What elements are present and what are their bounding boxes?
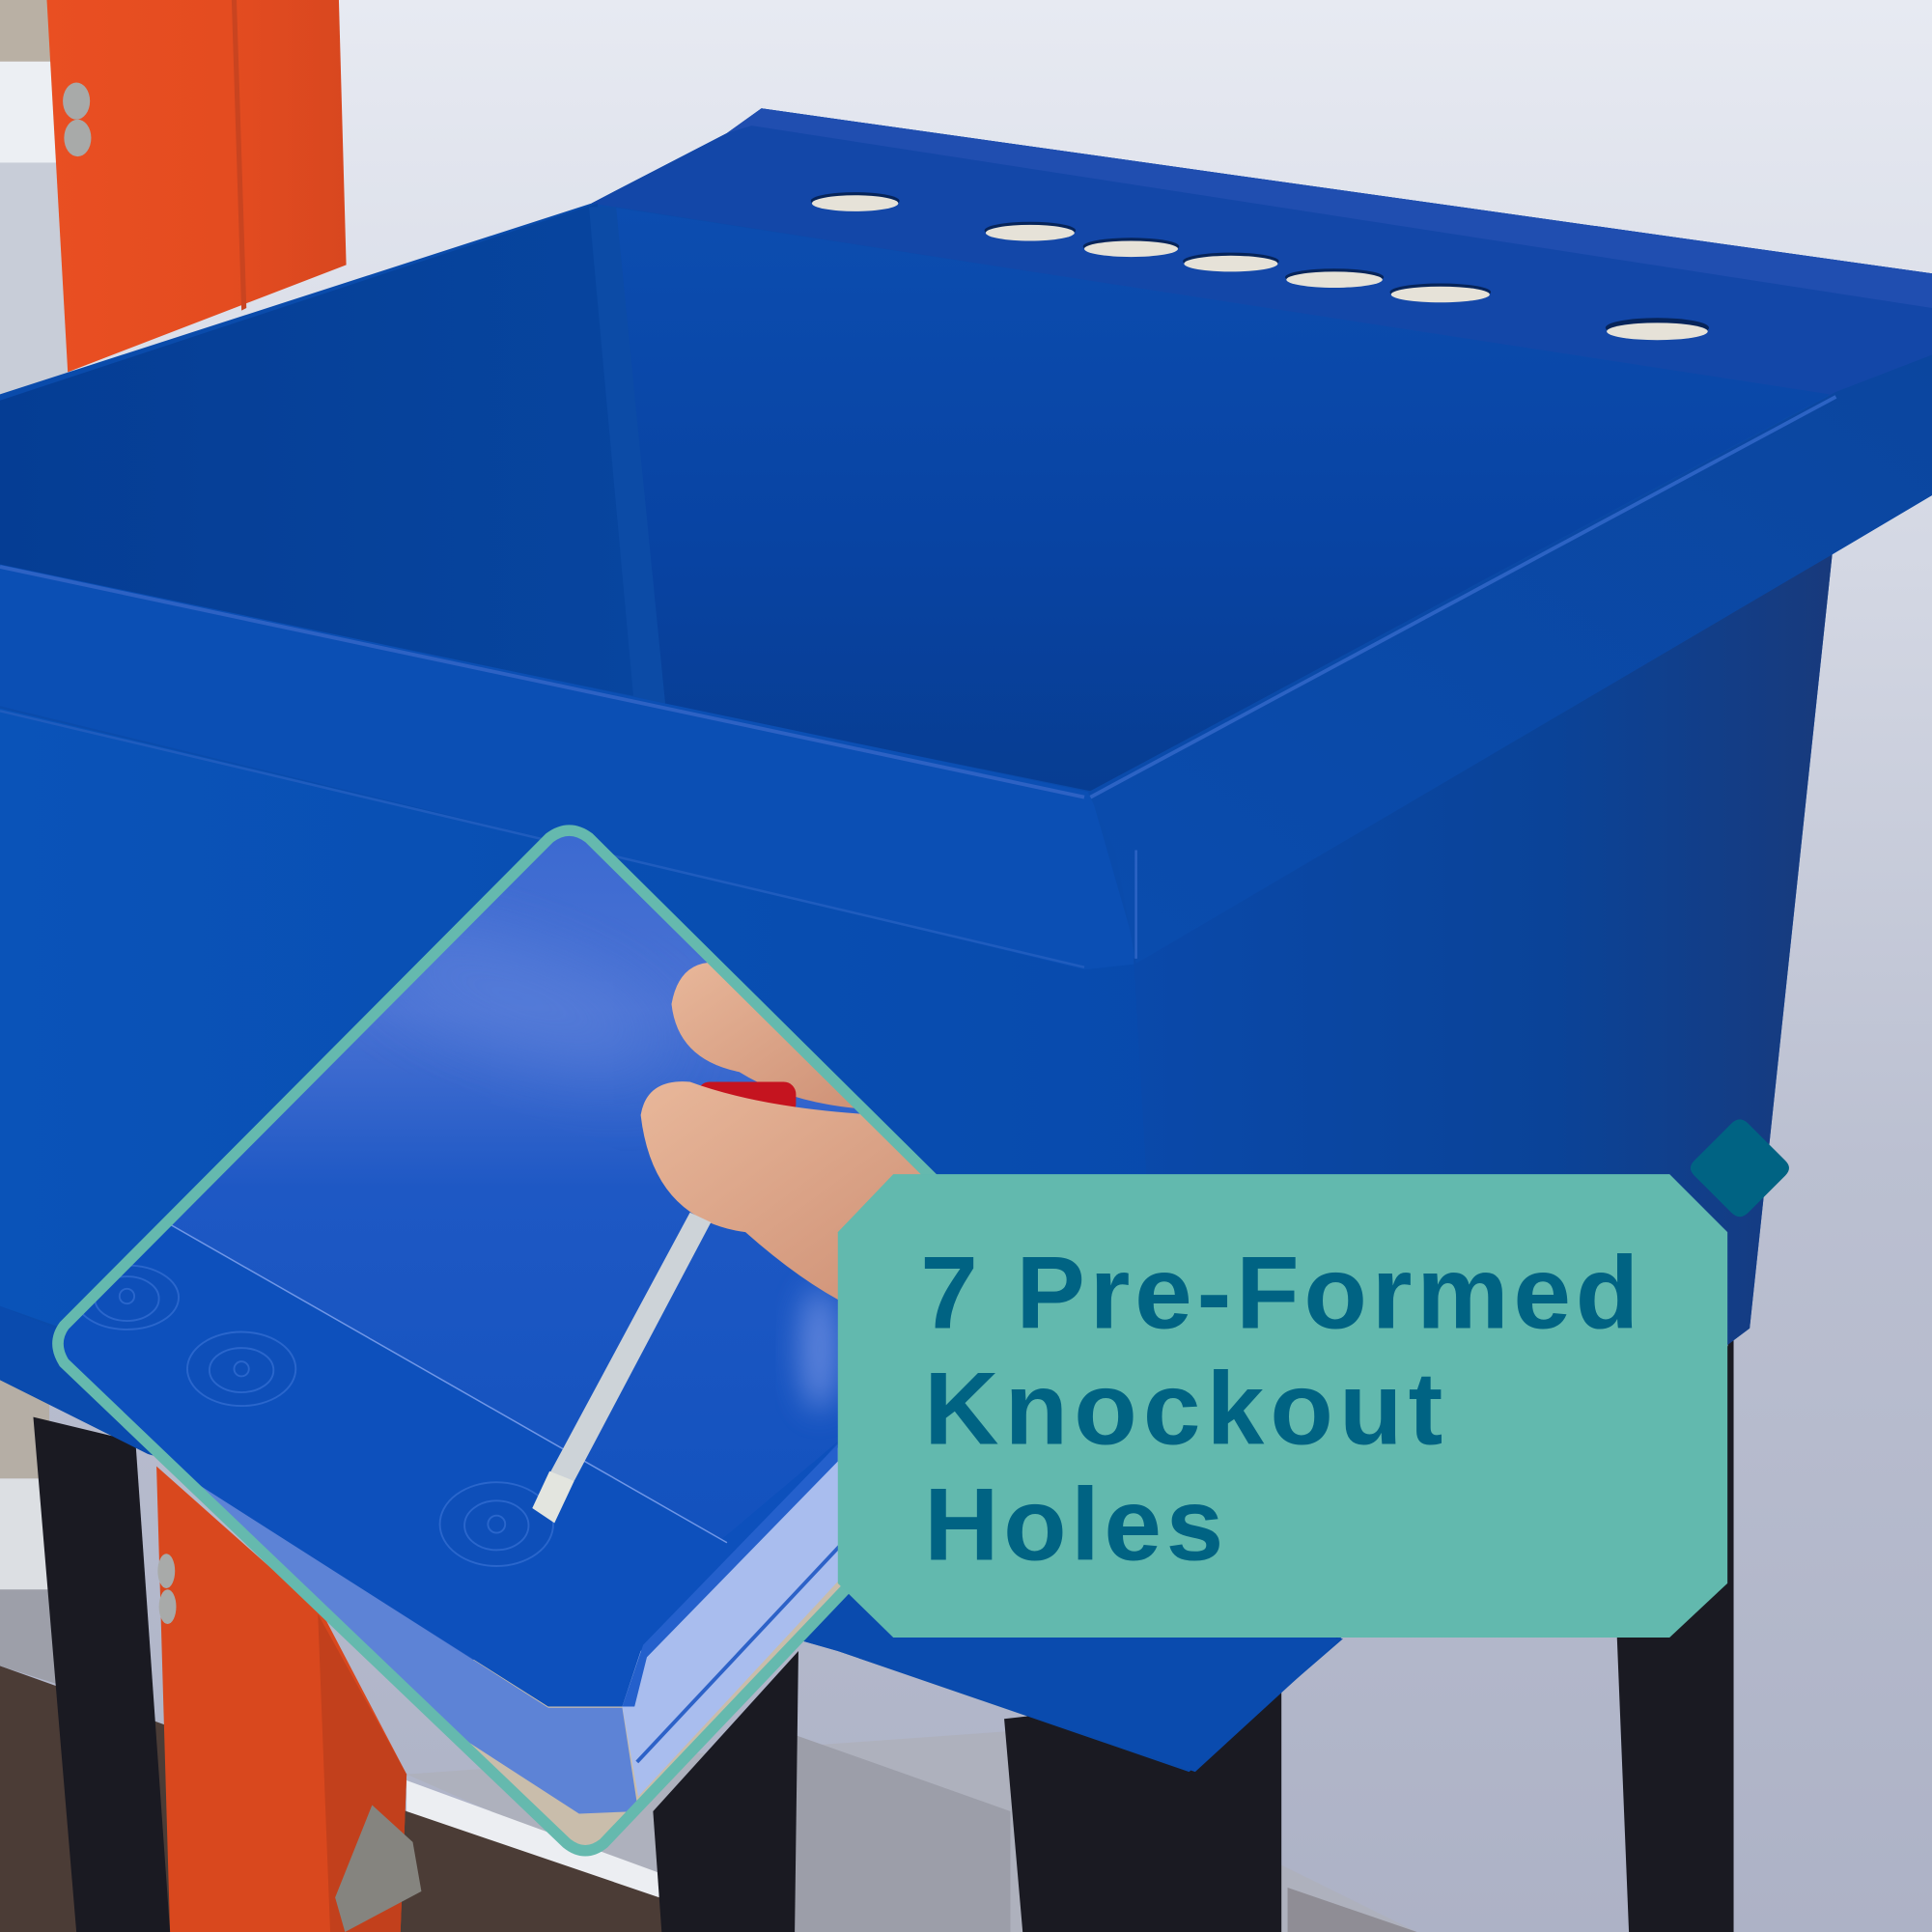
callout heading: 7 Pre-Formed [920, 1235, 1638, 1351]
pale lip [201, 1487, 637, 1813]
right body [1134, 554, 1833, 1638]
soft highlight [427, 940, 635, 1078]
wood surface [469, 1582, 841, 1845]
interior left wall [0, 204, 634, 696]
screwdriver [549, 1213, 711, 1481]
callout card [838, 1174, 1727, 1638]
knockout circles [75, 1266, 553, 1566]
callout heading: Knockout [924, 1351, 1442, 1467]
callout heading: Holes [924, 1467, 1223, 1582]
back deck rim [592, 108, 1932, 397]
upper front rim [0, 564, 1139, 969]
inset border [58, 830, 1089, 1851]
inset background [351, 1582, 474, 1660]
lower panel [52, 1222, 838, 1706]
hand [672, 963, 854, 1108]
inset photo: knockout being removed [52, 825, 937, 1856]
sink panel [173, 836, 841, 1707]
background shelf at left [0, 0, 74, 1592]
lower body front [0, 709, 1343, 1772]
interior back wall [610, 207, 1830, 791]
callout heading [920, 1235, 1638, 1582]
white side edge [622, 1448, 838, 1796]
floor and baseboard [0, 1589, 1417, 1932]
sink legs [33, 1330, 1734, 1932]
knockout holes on deck [811, 192, 1709, 340]
right rim [1088, 355, 1932, 964]
accent diamond [1691, 1119, 1789, 1217]
ladder [46, 0, 421, 1932]
